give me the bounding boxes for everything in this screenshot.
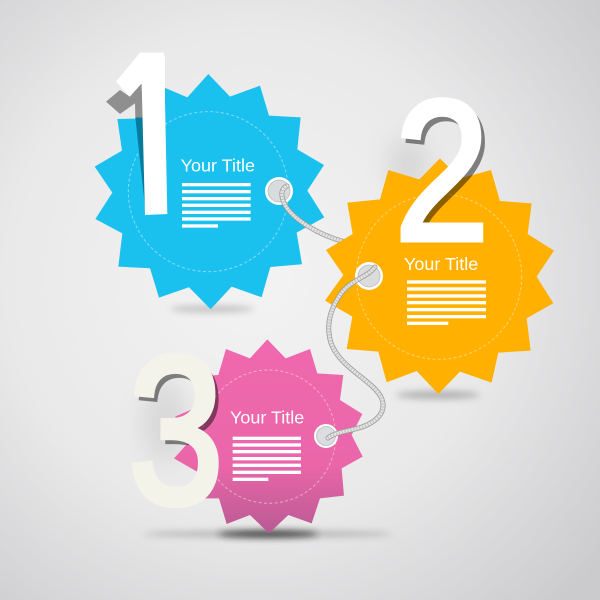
text lines: step 2 [407,280,486,325]
panel: step 3 pink badge [132,340,363,534]
text lines: step 3 [233,437,301,481]
title: step 3: Your Title [230,407,304,427]
title: step 2: Your Title [404,254,478,274]
shadow: blue badge [170,306,254,312]
soft shadow of numeral 3 [143,378,187,462]
shadow: pink badge wide [143,530,393,538]
text lines: step 1 [182,183,251,228]
numeral 2: 2 [394,59,490,283]
orange star shape [325,158,554,394]
numeral 3 [132,365,219,508]
numeral 1 [106,52,168,215]
dashed circle [128,112,288,272]
numeral 2: 2 [398,64,494,288]
numeral 3: 3 [132,317,228,553]
numeral 3: 3 [128,312,224,548]
eyelet: step 3 [314,424,338,448]
rope: blue to orange [282,186,345,242]
numeral 1: 1 [87,6,215,264]
panel: step 1 blue badge [94,52,324,310]
rope: orange to pink [328,267,383,438]
shadow: pink badge core [218,530,318,538]
title: step 1: Your Title [181,156,255,176]
blue star shape [95,74,324,309]
numeral 2 [400,97,485,242]
panel: step 2 orange badge [325,97,554,394]
shadow: orange badge [396,391,480,399]
dashed circle [202,370,336,503]
eyelet: step 2 [355,262,383,290]
eyelet: step 1 [265,177,293,205]
soft shadow of numeral 2 [388,135,428,195]
pink star shape [174,339,363,533]
dashed circle [356,194,522,359]
